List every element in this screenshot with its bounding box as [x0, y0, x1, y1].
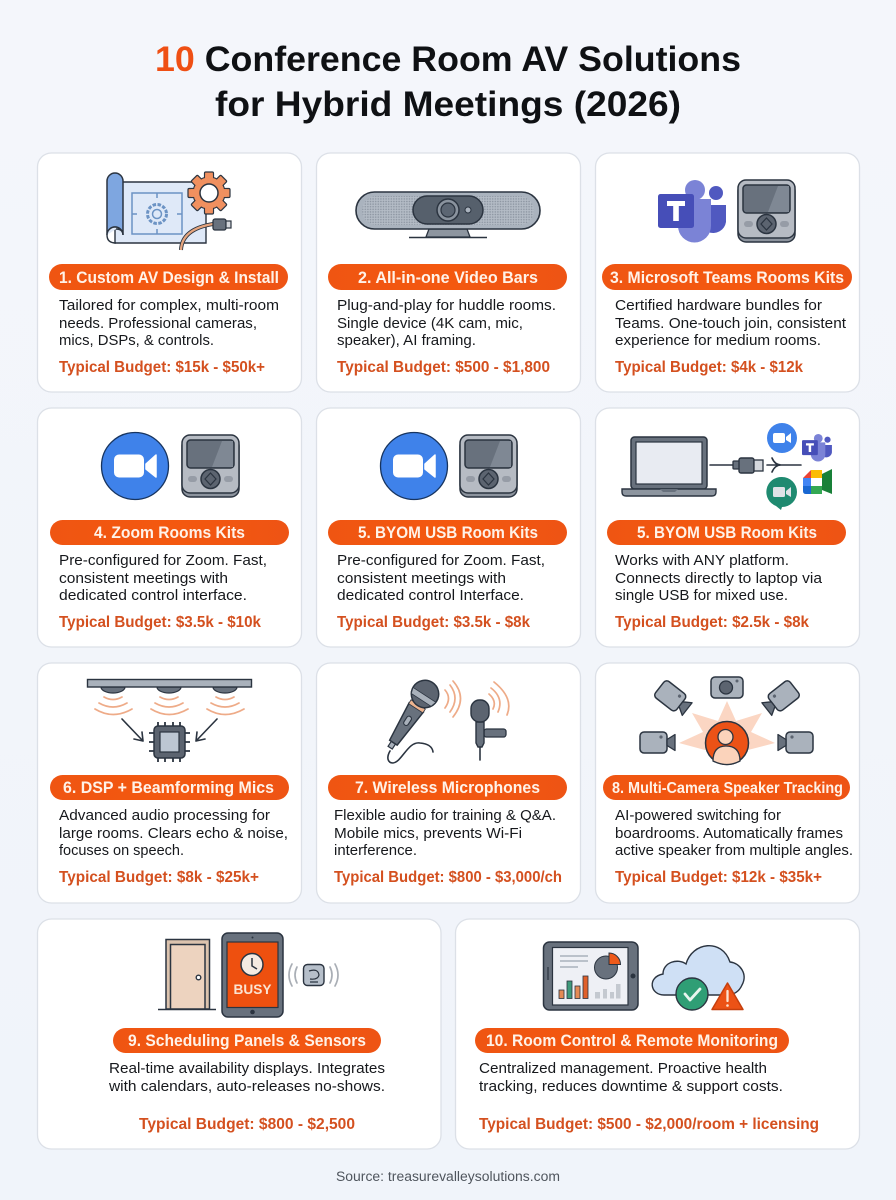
- icon: ceiling mics and DSP chip: [88, 680, 252, 762]
- title: [155, 40, 741, 124]
- icon: touch controller: [738, 180, 795, 242]
- panel: wireless microphones: [316, 663, 580, 903]
- description: tracking, reduces downtime & support costs.: [479, 1078, 783, 1095]
- description: needs. Professional cameras,: [59, 315, 257, 332]
- description: Centralized management. Proactive health: [479, 1060, 767, 1077]
- icon: laptop connected by USB to platforms: [622, 423, 832, 510]
- heading pill: [113, 1028, 381, 1053]
- icon: door, busy tablet, sensor: [158, 933, 338, 1017]
- icon: door, busy tablet, sensor: BUSY: [234, 981, 272, 997]
- description: [59, 297, 279, 349]
- panel: DSP and beamforming: [38, 663, 302, 903]
- heading pill: [49, 264, 288, 290]
- description: [59, 552, 267, 604]
- heading pill: 1. Custom AV Design & Install: [59, 269, 279, 287]
- heading pill: [475, 1028, 789, 1053]
- description: [615, 807, 853, 859]
- heading pill: 5. BYOM USB Room Kits: [358, 524, 538, 542]
- heading pill: 4. Zoom Rooms Kits: [94, 524, 245, 542]
- description: dedicated control Interface.: [337, 587, 524, 604]
- panel: room control: [456, 919, 860, 1149]
- budget: Typical Budget: $12k - $35k+: [615, 869, 822, 886]
- heading pill: [50, 775, 289, 800]
- heading pill: 6. DSP + Beamforming Mics: [63, 779, 274, 797]
- heading pill: 2. All-in-one Video Bars: [358, 269, 538, 287]
- budget: Typical Budget: $3.5k - $10k: [59, 614, 261, 631]
- description: with calendars, auto-releases no-shows.: [108, 1078, 385, 1095]
- description: interference.: [334, 842, 417, 859]
- panel: scheduling panels: [38, 919, 441, 1149]
- icon: handheld and lapel microphones: [379, 675, 509, 763]
- description: Pre-configured for Zoom. Fast,: [337, 552, 545, 569]
- description: Certified hardware bundles for: [615, 297, 822, 314]
- description: [108, 1060, 385, 1095]
- heading pill: [602, 264, 852, 290]
- icon: blueprint and gear: [107, 172, 231, 250]
- description: Pre-configured for Zoom. Fast,: [59, 552, 267, 569]
- panel: BYOM kits with Zoom: [316, 408, 580, 647]
- budget: Typical Budget: $800 - $2,500: [139, 1116, 355, 1133]
- heading pill: [328, 264, 567, 290]
- description: consistent meetings with: [337, 570, 506, 587]
- heading pill: [50, 520, 289, 545]
- description: Flexible audio for training & Q&A.: [334, 807, 556, 824]
- description: [334, 807, 556, 859]
- description: Teams. One-touch join, consistent: [615, 315, 847, 332]
- description: Advanced audio processing for: [59, 807, 270, 824]
- title: for Hybrid Meetings (2026): [215, 85, 681, 124]
- panel: BYOM kits any platform: [596, 408, 860, 647]
- panel: custom AV design: [38, 153, 302, 392]
- description: [337, 552, 545, 604]
- source line: Source: treasurevalleysolutions.com: [336, 1169, 560, 1184]
- budget: Typical Budget: $3.5k - $8k: [337, 614, 530, 631]
- description: dedicated control interface.: [59, 587, 247, 604]
- description: Single device (4K cam, mic,: [337, 315, 523, 332]
- description: Tailored for complex, multi-room: [59, 297, 279, 314]
- heading pill: [603, 775, 850, 800]
- title: 10 Conference Room AV Solutions: [155, 40, 741, 79]
- budget: Typical Budget: $4k - $12k: [615, 359, 803, 376]
- icon: Zoom logo: [102, 432, 168, 500]
- icon: monitoring tablet and cloud status: [544, 942, 744, 1010]
- description: Connects directly to laptop via: [615, 570, 823, 587]
- description: speaker), AI framing.: [337, 332, 476, 349]
- description: AI-powered switching for: [615, 807, 781, 824]
- description: Real-time availability displays. Integrates: [109, 1060, 385, 1077]
- description: Works with ANY platform.: [615, 552, 789, 569]
- description: experience for medium rooms.: [615, 332, 821, 349]
- budget: Typical Budget: $8k - $25k+: [59, 869, 259, 886]
- heading pill: [607, 520, 846, 545]
- heading pill: 7. Wireless Microphones: [355, 779, 540, 797]
- description: mics, DSPs, & controls.: [59, 332, 214, 349]
- budget: Typical Budget: $2.5k - $8k: [615, 614, 809, 631]
- panel: video bars: [316, 153, 580, 392]
- icon: Zoom logo: [380, 432, 448, 500]
- heading pill: 5. BYOM USB Room Kits: [637, 524, 817, 542]
- budget: Typical Budget: $500 - $1,800: [337, 359, 550, 376]
- budget: Typical Budget: $15k - $50k+: [59, 359, 265, 376]
- heading pill: 3. Microsoft Teams Rooms Kits: [610, 269, 844, 287]
- panel: Microsoft Teams kits: [596, 153, 860, 392]
- budget: Typical Budget: $500 - $2,000/room + licensing: [479, 1116, 819, 1133]
- heading pill: [328, 520, 567, 545]
- description: focuses on speech.: [59, 842, 184, 859]
- description: [337, 297, 556, 349]
- description: [479, 1060, 783, 1095]
- budget: Typical Budget: $800 - $3,000/ch: [334, 869, 562, 886]
- description: [615, 297, 847, 349]
- heading pill: 8. Multi-Camera Speaker Tracking: [612, 780, 843, 797]
- description: single USB for mixed use.: [615, 587, 788, 604]
- heading pill: 10. Room Control & Remote Monitoring: [486, 1032, 778, 1050]
- description: [615, 552, 823, 604]
- heading pill: [328, 775, 567, 800]
- description: large rooms. Clears echo & noise,: [59, 825, 288, 842]
- icon: video bar: [356, 192, 540, 238]
- icon: touch controller: [182, 435, 239, 497]
- heading pill: 9. Scheduling Panels & Sensors: [128, 1032, 366, 1050]
- icon: touch controller: [460, 435, 517, 497]
- panel: multi-camera tracking: [596, 663, 860, 903]
- description: [59, 807, 288, 859]
- description: Plug-and-play for huddle rooms.: [337, 297, 556, 314]
- icon: Teams logo: [658, 180, 726, 242]
- description: boardrooms. Automatically frames: [615, 825, 843, 842]
- icon: cameras around speaker: [640, 677, 813, 764]
- panel: Zoom Rooms kits: [38, 408, 302, 647]
- description: active speaker from multiple angles.: [615, 842, 853, 859]
- description: Mobile mics, prevents Wi-Fi: [334, 825, 522, 842]
- description: consistent meetings with: [59, 570, 228, 587]
